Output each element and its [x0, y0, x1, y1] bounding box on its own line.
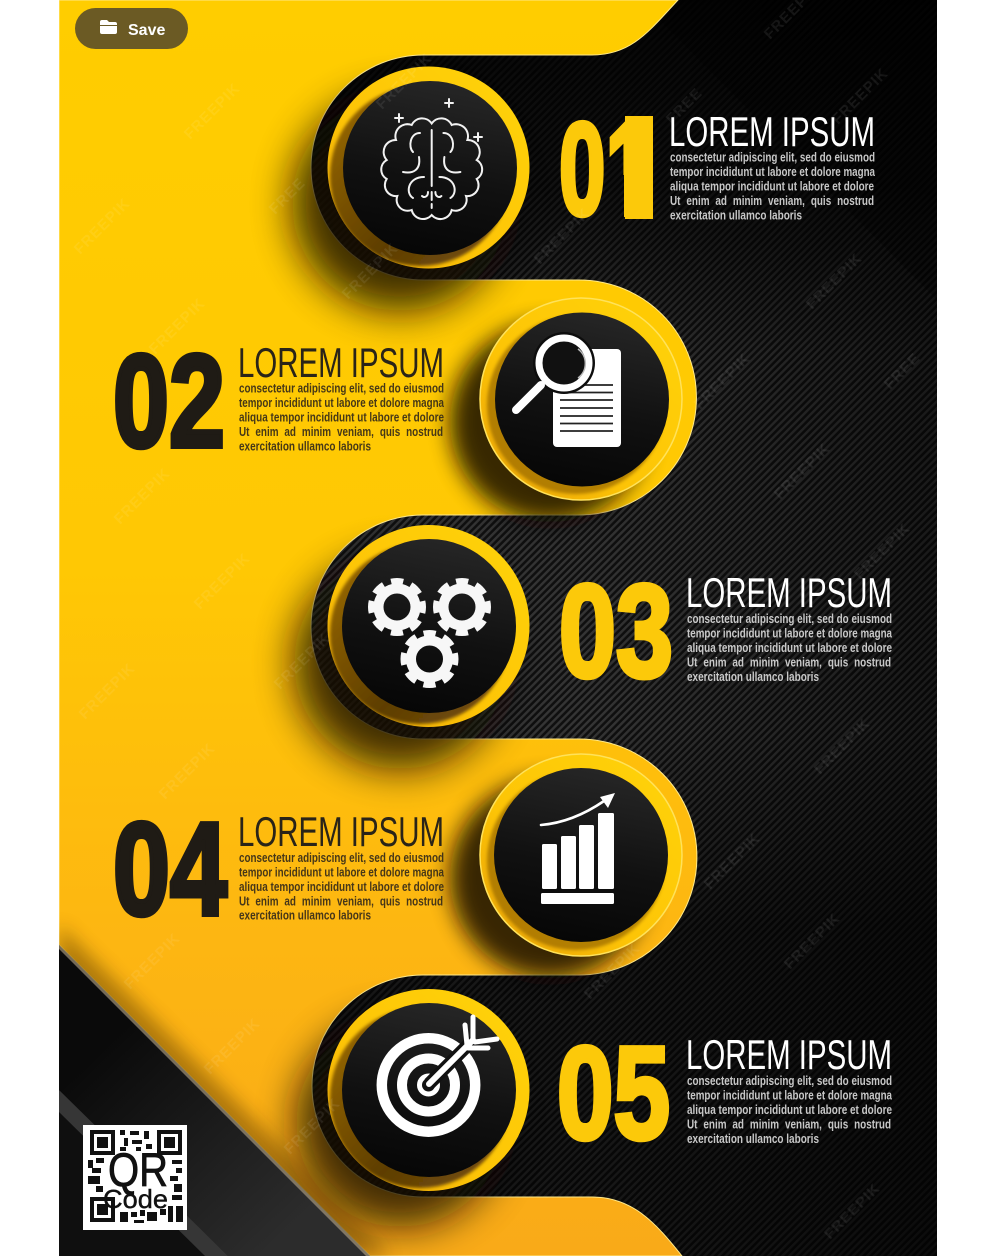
watermarks: FREEPIK: [339, 240, 402, 303]
text block 03: exercitation ullamco laboris: [687, 670, 819, 684]
watermarks: FREEPIK: [821, 1180, 884, 1243]
text block 02: [239, 382, 445, 454]
text block 01: exercitation ullamco laboris: [670, 208, 802, 222]
text block 04: consectetur adipiscing elit, sed do eiusmod: [239, 851, 444, 865]
watermarks: FREEPIK: [191, 550, 254, 613]
title 02: LOREM IPSUM: [238, 339, 444, 386]
watermarks: FREEPIK: [146, 295, 209, 358]
shadows cast on the panel: [292, 95, 650, 1227]
watermarks: FREEPIK: [156, 740, 219, 803]
text block 04: tempor incididunt ut labore et dolore magna: [239, 866, 445, 880]
panel: step 02: [113, 298, 682, 500]
text block 02: exercitation ullamco laboris: [239, 440, 371, 454]
circle badge 01: [328, 66, 530, 268]
text block 03: Ut enim ad minim veniam, quis nostrud: [687, 656, 891, 670]
watermarks: FREEPIK: [691, 350, 754, 413]
watermarks: FREE: [663, 85, 706, 128]
text block 05: [687, 1074, 893, 1146]
title 01: LOREM IPSUM: [669, 108, 875, 155]
watermarks: FREEPIK: [771, 440, 834, 503]
number 05: 05: [557, 1020, 670, 1166]
watermarks: FREEPIK: [851, 520, 914, 583]
title 05: LOREM IPSUM: [686, 1031, 892, 1078]
icon: magnifier over document: [516, 332, 621, 447]
text block 03: consectetur adipiscing elit, sed do eiusmod: [687, 612, 892, 626]
circle badge 04: [480, 754, 682, 956]
text block 02: Ut enim ad minim veniam, quis nostrud: [239, 425, 443, 439]
number 04: 04: [113, 796, 227, 942]
icon: rising bar chart: [541, 793, 615, 904]
circle badge 02: [480, 298, 682, 500]
text block 01: consectetur adipiscing elit, sed do eiusmod: [670, 150, 875, 164]
text block 03: aliqua tempor incididunt ut labore et dolore: [687, 641, 892, 655]
watermarks: FREE: [266, 175, 309, 218]
number 01: 01: [559, 96, 652, 242]
watermarks: FREEPIK: [181, 80, 244, 143]
watermarks: FREEPIK: [829, 65, 892, 128]
watermarks: FREEPIK: [121, 930, 184, 993]
QR code: [83, 1125, 187, 1230]
panel: step 01: [328, 66, 876, 268]
watermarks: FREEPIK: [71, 195, 134, 258]
text block 05: consectetur adipiscing elit, sed do eiusmod: [687, 1074, 892, 1088]
number 02: 02: [113, 328, 225, 474]
icon: target with arrow: [382, 1017, 497, 1132]
watermarks: FREEPIK: [781, 910, 844, 973]
watermarks: FREEPIK: [811, 715, 874, 778]
text block 02: consectetur adipiscing elit, sed do eiusmod: [239, 382, 444, 396]
watermarks: FREEPIK: [701, 830, 764, 893]
text block 04: aliqua tempor incididunt ut labore et dolore: [239, 880, 444, 894]
watermarks: FREEPIK: [581, 940, 644, 1003]
button label: Save: [128, 22, 165, 39]
background: yellow winding panel: [59, 0, 697, 1256]
text block 03: [687, 612, 893, 684]
panel: step 05: [328, 989, 893, 1191]
circle badge 05: [328, 989, 530, 1191]
number 03: 03: [559, 558, 673, 704]
text block 02: tempor incididunt ut labore et dolore magna: [239, 396, 445, 410]
text block 03: tempor incididunt ut labore et dolore magna: [687, 626, 893, 640]
watermarks: FREEPIK: [803, 250, 866, 313]
panel: step 04: [113, 754, 682, 956]
watermarks: FREEPIK: [281, 1095, 344, 1158]
watermarks: FREEPIK: [76, 660, 139, 723]
icon: folder: [100, 20, 117, 34]
watermarks: FREEPIK: [111, 465, 174, 528]
text block 01: tempor incididunt ut labore et dolore magna: [670, 165, 876, 179]
QR label: QR: [108, 1143, 168, 1196]
title 04: LOREM IPSUM: [238, 808, 444, 855]
watermarks: FREE: [881, 350, 924, 393]
panel: lower-left dark corner: [59, 925, 390, 1256]
save button: [75, 8, 188, 49]
text block 05: tempor incididunt ut labore et dolore magna: [687, 1088, 893, 1102]
icon: brain: [381, 99, 482, 219]
text block 05: aliqua tempor incididunt ut labore et dolore: [687, 1103, 892, 1117]
text block 01: [670, 150, 876, 222]
icon: gears: [372, 582, 488, 684]
code label: Code: [103, 1184, 168, 1214]
watermarks: FREEPIK: [201, 1015, 264, 1078]
number 01: [560, 116, 653, 219]
text block 04: [239, 851, 445, 922]
title 03: LOREM IPSUM: [686, 569, 892, 616]
watermarks: FREEPIK: [531, 205, 594, 268]
text block 02: aliqua tempor incididunt ut labore et dolore: [239, 410, 444, 424]
text block 04: Ut enim ad minim veniam, quis nostrud: [239, 894, 443, 908]
watermarks: FREEPIK: [271, 630, 334, 693]
panel: step 03: [328, 525, 893, 727]
background: dark striped panel: [312, 0, 937, 1256]
text block 01: aliqua tempor incididunt ut labore et dolore: [670, 180, 874, 194]
text block 01: Ut enim ad minim veniam, quis nostrud: [670, 194, 874, 208]
text block 04: exercitation ullamco laboris: [239, 908, 371, 922]
text block 05: exercitation ullamco laboris: [687, 1132, 819, 1146]
circle badge 03: [328, 525, 530, 727]
watermarks: FREEPIK: [373, 50, 436, 113]
text block 05: Ut enim ad minim veniam, quis nostrud: [687, 1118, 891, 1132]
